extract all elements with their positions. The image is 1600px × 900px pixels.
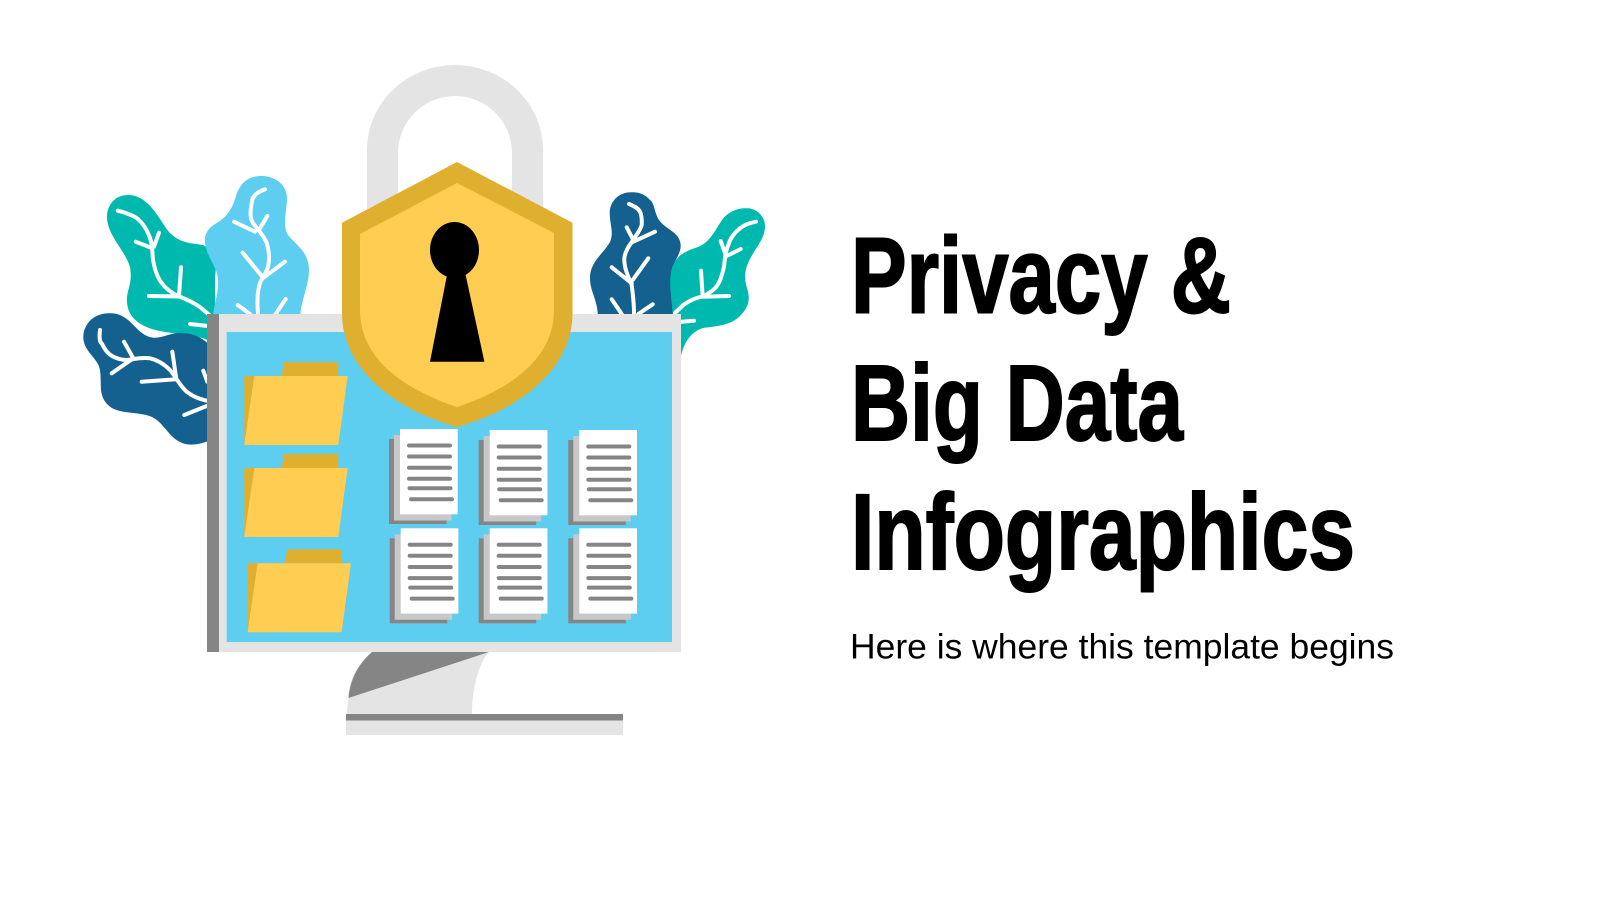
monitor frame <box>207 314 681 652</box>
document icons <box>389 429 637 623</box>
title <box>851 215 1355 592</box>
leaf: light blue <box>205 176 309 318</box>
illustration: padlock over computer monitor with leaves <box>83 65 765 735</box>
title: Infographics <box>851 471 1355 592</box>
padlock shackle <box>367 65 543 220</box>
monitor stand <box>346 652 623 735</box>
subtitle: Here is where this template begins <box>850 628 1394 666</box>
leaf: left dark blue <box>83 313 212 445</box>
folder icons <box>244 362 351 632</box>
keyhole <box>430 222 484 362</box>
leaf: left teal <box>107 195 216 345</box>
shield with keyhole <box>342 162 572 427</box>
leaf: right teal <box>668 208 765 362</box>
title: Privacy & <box>851 215 1231 336</box>
title: Big Data <box>851 342 1184 463</box>
leaf: right dark blue <box>590 192 681 318</box>
